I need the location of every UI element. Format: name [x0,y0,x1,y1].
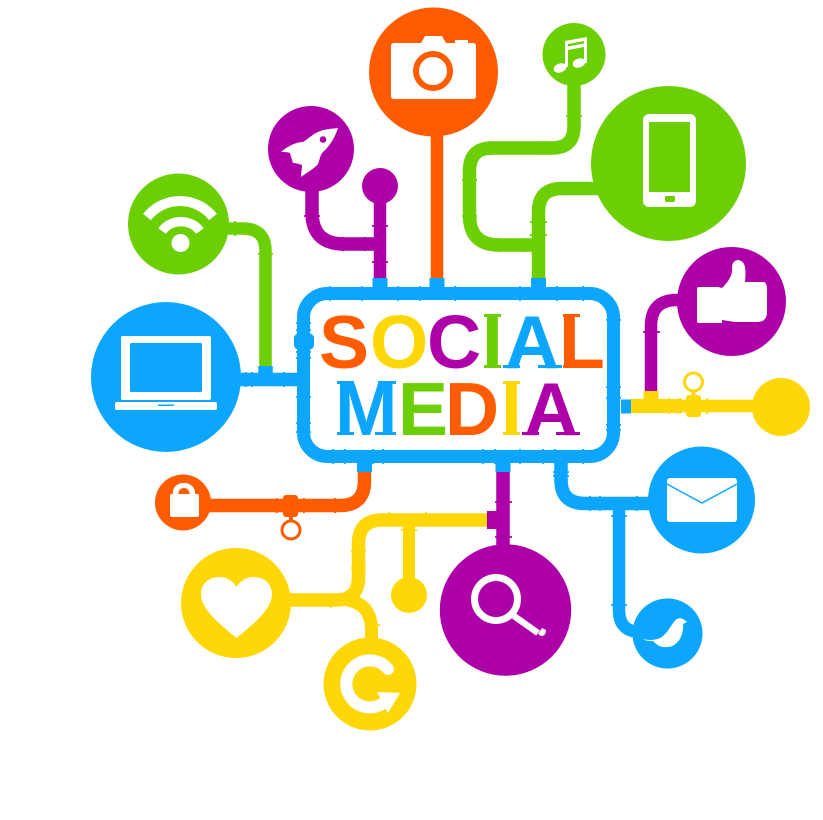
pipe: wifi [222,221,273,368]
pipe: lock with valve [205,470,364,513]
pipe: laptop [235,366,300,387]
icon: laptop circle [91,302,241,452]
pipe: yellow valve right [630,391,765,414]
icon: thumbs up circle [677,247,786,356]
icon: bird circle [632,598,702,668]
icon: music circle [542,23,606,86]
pipe: thumbs up [643,300,685,392]
title: SOCIAL MEDIA [319,300,605,451]
icon: phone circle [591,86,746,241]
icon: heart circle [181,548,291,658]
pipe: search [487,466,512,550]
icon: purple ball [362,168,398,204]
pipe: camera [431,130,443,282]
pipe: rocket and purple ball [304,185,388,282]
icon: yellow ball with valve ring [684,373,810,436]
icon: rocket circle [268,106,354,192]
icon: wifi circle [128,174,229,274]
central frame [296,286,621,464]
icon: refresh circle [324,638,416,730]
icon: lock circle with valve ring [155,474,300,539]
title line: SOCIAL: SOCIAL [319,300,605,384]
icon: mail circle [648,446,755,554]
icon: search circle [440,544,571,676]
pipe: mail and bird [553,463,655,632]
collars: blue joints on frame [364,278,631,472]
pipes: connections [205,80,765,644]
icon: small yellow ball [391,577,427,613]
title letter serifs [337,314,580,435]
pipe: music and phone [462,80,600,282]
pipe: yellow branch to heart and refresh [285,512,488,644]
title line: MEDIA: MEDIA [335,367,578,451]
icon: camera circle [369,8,498,136]
